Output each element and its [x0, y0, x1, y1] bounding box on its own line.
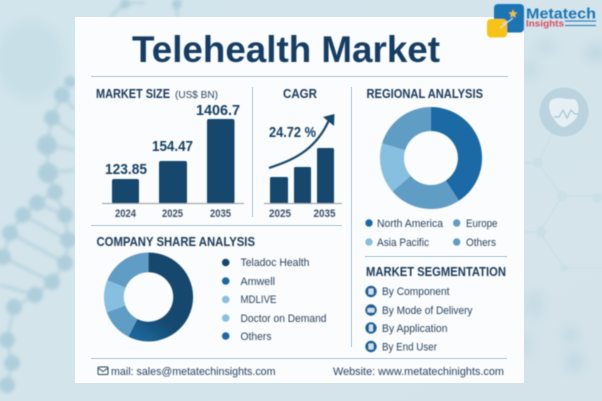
divider lines [91, 76, 508, 358]
legend: companies: Teladoc Health [240, 257, 310, 269]
background: molecule network [524, 134, 602, 272]
legend: companies: Others [240, 331, 272, 343]
background: DNA helix [0, 0, 182, 393]
icon: mail envelope [98, 367, 108, 374]
logo wordmark: Insights [526, 18, 564, 30]
year labels: 2025 [269, 208, 291, 220]
logo: Metatech Insights [487, 4, 596, 38]
icon: heart monitor badge [540, 88, 588, 136]
legend: regions: North America [377, 218, 444, 230]
panel: CAGR chart [264, 87, 342, 220]
donut chart: company share [104, 252, 193, 341]
bar chart: market size bars [112, 119, 234, 204]
bar chart: CAGR bars [270, 148, 334, 204]
bar values: 154.47 [152, 139, 193, 155]
CAGR value: 24.72 % [269, 125, 316, 141]
panel: market size chart [96, 87, 244, 220]
footer: contact details [98, 366, 504, 378]
logo wordmark: Metatech [526, 6, 596, 22]
heading: CAGR: CAGR [283, 87, 317, 101]
panel: company share analysis [96, 235, 326, 343]
year labels: 2025 [162, 208, 183, 220]
bar values: 1406.7 [196, 103, 240, 119]
heading: market size: (US$ BN) [175, 89, 218, 101]
item: by end user: By End User [382, 342, 437, 354]
legend: companies: Doctor on Demand [240, 313, 326, 325]
website address: Website: www.metatechinights.com [333, 366, 504, 378]
email address: mail: sales@metatechinsights.com [111, 366, 276, 378]
heading: market size [96, 87, 218, 101]
title: Telehealth Market [132, 29, 440, 70]
year labels: 2035 [314, 208, 336, 220]
logo mark [487, 4, 524, 38]
item: by application: By Application [382, 323, 448, 335]
bar values: 123.85 [105, 162, 147, 178]
legend: regions: Others [466, 237, 496, 249]
heading: regional analysis: REGIONAL ANALYSIS [366, 87, 483, 101]
legend: companies [222, 257, 326, 343]
legend: regions: Europe [466, 218, 498, 230]
growth arrow [269, 114, 334, 168]
legend: regions: Asia Pacific [377, 237, 429, 249]
logo wordmark [526, 6, 596, 30]
panel: market segmentation [365, 265, 506, 354]
white content panel [75, 17, 524, 383]
year labels [269, 208, 336, 220]
item: by component: By Component [382, 286, 450, 298]
legend: regions [365, 218, 498, 249]
year labels: 2035 [210, 208, 231, 220]
year labels [115, 208, 231, 220]
panel: regional analysis [365, 87, 498, 249]
heading: market segmentation: MARKET SEGMENTATION [366, 265, 506, 279]
item: by mode of delivery: By Mode of Delivery [382, 305, 473, 317]
item: by end user [365, 341, 437, 354]
heading: company share: COMPANY SHARE ANALYSIS [96, 235, 255, 249]
legend: companies: Amwell [240, 276, 275, 288]
bar values [105, 103, 240, 178]
donut chart: regions [380, 107, 482, 209]
legend: companies: MDLIVE [240, 294, 276, 306]
year labels: 2024 [115, 208, 137, 220]
heading: market size: MARKET SIZE [96, 87, 170, 101]
